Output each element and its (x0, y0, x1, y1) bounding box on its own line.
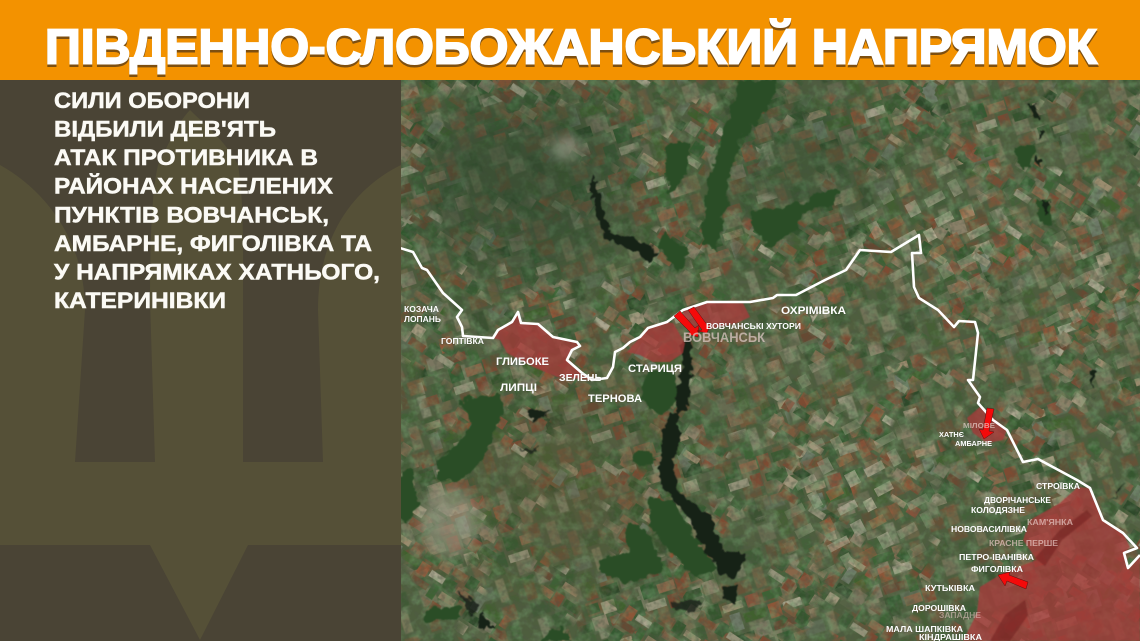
text block: summary (54, 88, 380, 313)
label: Stroivka: СТРОЇВКА (1036, 482, 1080, 491)
title: ПІВДЕННО-СЛОБОЖАНСЬКИЙ НАПРЯМОК (45, 22, 1097, 77)
arrow: Vovchansk west attack (674, 311, 699, 337)
label: Kutkivka: КУТЬКІВКА (925, 584, 975, 593)
label: Petro-Ivanivka: ПЕТРО-ІВАНІВКА (959, 553, 1034, 562)
label: Mala Shapkivka: МАЛА ШАПКІВКА (886, 625, 963, 634)
label: Vovchansk: ВОВЧАНСЬК (683, 329, 765, 345)
zone: Milove (967, 407, 1007, 443)
label: Vovchanski Khutory: ВОВЧАНСЬКІ ХУТОРИ (706, 321, 801, 331)
arrow: Vovchansk east attack (688, 307, 711, 333)
text block: summary: РАЙОНАХ НАСЕЛЕНИХ (54, 174, 334, 199)
label: Kamianka: КАМ'ЯНКА (1027, 518, 1073, 527)
arrow: Ambarne attack (979, 408, 994, 439)
label: Starytsia: СТАРИЦЯ (628, 363, 682, 375)
label: Fyholivka: ФИГОЛІВКА (971, 565, 1023, 574)
text block: summary: СИЛИ ОБОРОНИ (54, 88, 250, 113)
forests (396, 80, 1062, 641)
occupied zones (493, 302, 1140, 641)
label: Kozacha Lopan (404, 306, 441, 322)
text block: summary: АМБАРНЕ, ФИГОЛІВКА ТА (54, 231, 372, 256)
zone: south-east front (963, 487, 1140, 641)
label: Zapadne: ЗАПАДНЕ (939, 611, 982, 620)
arrow: Fyholivka attack (998, 572, 1028, 589)
label: Zelene: ЗЕЛЕНЬ (559, 372, 602, 384)
text block: summary: ПУНКТІВ ВОВЧАНСЬК, (54, 202, 329, 227)
label: Dvorichanske: ДВОРІЧАНСЬКЕ (984, 496, 1052, 505)
label: Khatnie: ХАТНЄ (939, 430, 965, 439)
label: Hoptivka: ГОПТІВКА (441, 337, 484, 346)
label: Ternova: ТЕРНОВА (588, 393, 642, 405)
label: Kolodiazne: КОЛОДЯЗНЕ (971, 506, 1026, 515)
urban areas (420, 136, 580, 556)
label: Kozacha Lopan: ЛОПАНЬ (404, 315, 441, 324)
label: Doroshivka: ДОРОШІВКА (912, 604, 966, 613)
text block: summary: КАТЕРИНІВКИ (54, 288, 226, 313)
text block: summary: АТАК ПРОТИВНИКА В (54, 145, 318, 170)
panel: left info background (0, 80, 401, 641)
zone: Vovchansk west (627, 322, 685, 362)
frontline border (400, 235, 1140, 568)
label: Ambarne: АМБАРНЕ (955, 439, 992, 448)
label: Okhrimivka: ОХРІМІВКА (781, 305, 846, 317)
label: Lyptsi: ЛИПЦІ (500, 382, 537, 394)
label: Kozacha Lopan: КОЗАЧА (404, 305, 439, 314)
label: Novovasylivka: НОВОВАСИЛІВКА (951, 525, 1027, 534)
map panel: satellite terrain (396, 80, 1140, 641)
label: Krasne Pershe: КРАСНЕ ПЕРШЕ (989, 539, 1059, 548)
text block: summary: ВІДБИЛИ ДЕВ'ЯТЬ (54, 117, 276, 142)
icon: trident watermark (0, 110, 401, 640)
zone: Hlyboke (493, 312, 592, 380)
rivers and reservoirs (458, 103, 1128, 628)
title: ПІВДЕННО-СЛОБОЖАНСЬКИЙ НАПРЯМОК (45, 20, 1097, 74)
label: Milove: МІЛОВЕ (963, 421, 995, 430)
regional tone (410, 90, 880, 570)
darker belts inside south-east zone (990, 510, 1092, 641)
text block: summary: У НАПРЯМКАХ ХАТНЬОГО, (54, 259, 380, 284)
label: Hlyboke: ГЛИБОКЕ (496, 356, 549, 368)
zone: Vovchansk east (683, 302, 750, 330)
header bar (0, 0, 1140, 80)
map labels (404, 305, 1080, 641)
